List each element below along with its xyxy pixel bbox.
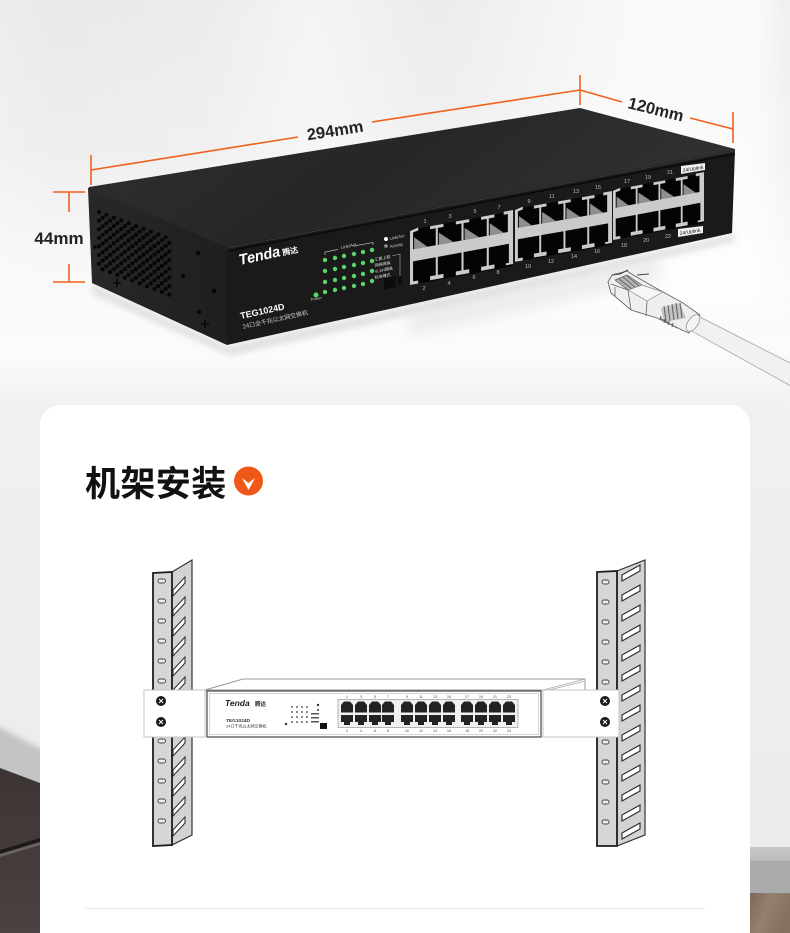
port numbers: 7 <box>497 205 501 211</box>
drawing port numbers <box>346 695 511 733</box>
drawing port numbers: 14 <box>433 729 437 733</box>
brand logo: Tenda <box>237 243 282 269</box>
port numbers: 5 <box>473 209 477 215</box>
switch top face <box>88 108 735 250</box>
port numbers: 22 <box>665 234 671 240</box>
card bottom divider <box>85 908 705 909</box>
switch floor shadow and reflection <box>92 234 735 356</box>
uplink label top: 24/Uplink <box>682 165 704 174</box>
port numbers: 8 <box>496 270 500 276</box>
dimension: 120mm depth: 120mm <box>626 94 686 126</box>
drawing port numbers: 9 <box>406 695 408 699</box>
model name <box>239 297 309 331</box>
port numbers: 9 <box>527 199 531 205</box>
LED legend and DIP switch: 网络隔离 <box>374 259 391 268</box>
dimension: 44mm height: 44mm <box>34 229 84 248</box>
port numbers: 14 <box>571 254 577 260</box>
port numbers: 17 <box>624 179 630 185</box>
model name: TEG1024D <box>239 301 286 321</box>
LED legend and DIP switch: 汇聚上联 <box>374 253 391 262</box>
background: left cabinet <box>0 712 70 933</box>
drawing port numbers: 10 <box>405 729 409 733</box>
drawing port numbers: 3 <box>360 695 362 699</box>
ear screws <box>156 696 610 727</box>
drawing port numbers: 12 <box>419 729 423 733</box>
LED group label: Power <box>310 295 323 302</box>
side vent holes <box>97 210 171 297</box>
port numbers: 20 <box>643 238 649 244</box>
drawing port numbers: 2 <box>346 729 348 733</box>
brand logo: 腾达 <box>281 244 299 258</box>
LED legend and DIP switch: VLAN隔离 <box>374 265 393 274</box>
port numbers: 13 <box>573 189 579 195</box>
drawing port numbers: 18 <box>465 729 469 733</box>
drawing port numbers: 11 <box>419 695 423 699</box>
port numbers: 12 <box>548 259 554 265</box>
dimension: 294mm width: 294mm <box>306 118 365 144</box>
drawing logo: 腾达 <box>255 700 267 708</box>
port numbers: 10 <box>525 264 531 270</box>
panel: rack installation card <box>40 405 750 933</box>
port numbers: 3 <box>448 214 452 220</box>
switch top outline <box>205 679 585 690</box>
drawing port numbers: 19 <box>479 695 483 699</box>
port numbers: 11 <box>549 194 555 200</box>
rack-mounted switch drawing <box>144 679 619 737</box>
side screws <box>93 245 216 328</box>
drawing port numbers: 1 <box>346 695 348 699</box>
drawing port numbers: 24 <box>507 729 511 733</box>
icon: orange down arrow <box>234 466 263 496</box>
drawing model name <box>226 718 266 728</box>
switch front face <box>227 150 735 345</box>
model name: 24口全千兆以太网交换机 <box>242 309 309 331</box>
LED legend and DIP switch: 标准模式 <box>374 271 391 280</box>
right rack rail <box>597 560 645 846</box>
dimension: 120mm depth <box>580 90 733 143</box>
right mounting ear <box>543 690 619 737</box>
RJ45 plug <box>608 271 700 333</box>
dimension: 294mm width <box>91 75 580 185</box>
port numbers: 6 <box>472 275 476 281</box>
drawing port numbers: 15 <box>447 695 451 699</box>
port numbers: 16 <box>594 249 600 255</box>
background: right floor and wood <box>750 847 790 933</box>
drawing model name: TEG1024D <box>226 718 251 724</box>
drawing port numbers: 17 <box>465 695 469 699</box>
ethernet cable <box>608 270 790 391</box>
drawing port numbers: 8 <box>387 729 389 733</box>
drawing LEDs <box>285 704 327 729</box>
switch side face <box>88 188 227 345</box>
port numbers: 18 <box>621 243 627 249</box>
LED legend and DIP switch: Activity <box>389 241 404 249</box>
drawing port numbers: 20 <box>479 729 483 733</box>
port numbers: 19 <box>645 175 651 181</box>
drawing port numbers: 4 <box>360 729 362 733</box>
LED group label <box>310 242 373 302</box>
drawing logo: Tenda <box>225 698 250 708</box>
cable sleeve <box>688 316 790 391</box>
switch front panel <box>207 691 541 737</box>
drawing port numbers: 22 <box>493 729 497 733</box>
uplink label bottom: 24/Uplink <box>679 228 701 237</box>
drawing port numbers: 5 <box>374 695 376 699</box>
status LEDs <box>314 248 374 298</box>
heading: 机架安装 <box>85 465 227 504</box>
drawing port numbers: 7 <box>387 695 389 699</box>
dimension: 44mm height <box>34 192 85 282</box>
left rack rail <box>153 560 192 846</box>
drawing logo <box>225 698 267 708</box>
network switch photo <box>88 108 735 345</box>
port numbers <box>422 170 673 292</box>
port numbers: 2 <box>422 286 426 292</box>
port block 9 to 16 <box>515 191 612 262</box>
drawing port numbers: 16 <box>447 729 451 733</box>
LED group label: Link/Act <box>340 242 358 250</box>
left mounting ear <box>144 690 205 737</box>
LED legend and DIP switch: Link/Act <box>389 233 406 241</box>
drawing model name: 24口千兆以太网交换机 <box>226 722 266 728</box>
drawing port numbers: 6 <box>374 729 376 733</box>
port numbers: 15 <box>595 185 601 191</box>
LED legend and DIP switch <box>374 233 406 290</box>
port numbers: 21 <box>667 170 673 176</box>
drawing port numbers: 21 <box>493 695 497 699</box>
port block 17 to 24 <box>613 172 704 240</box>
brand logo <box>237 239 299 269</box>
drawing port numbers: 13 <box>433 695 437 699</box>
port numbers: 4 <box>447 281 451 287</box>
drawing port numbers: 23 <box>507 695 511 699</box>
port numbers: 1 <box>423 219 427 225</box>
drawing ports <box>338 700 518 728</box>
port block 1 to 8 <box>410 210 513 285</box>
